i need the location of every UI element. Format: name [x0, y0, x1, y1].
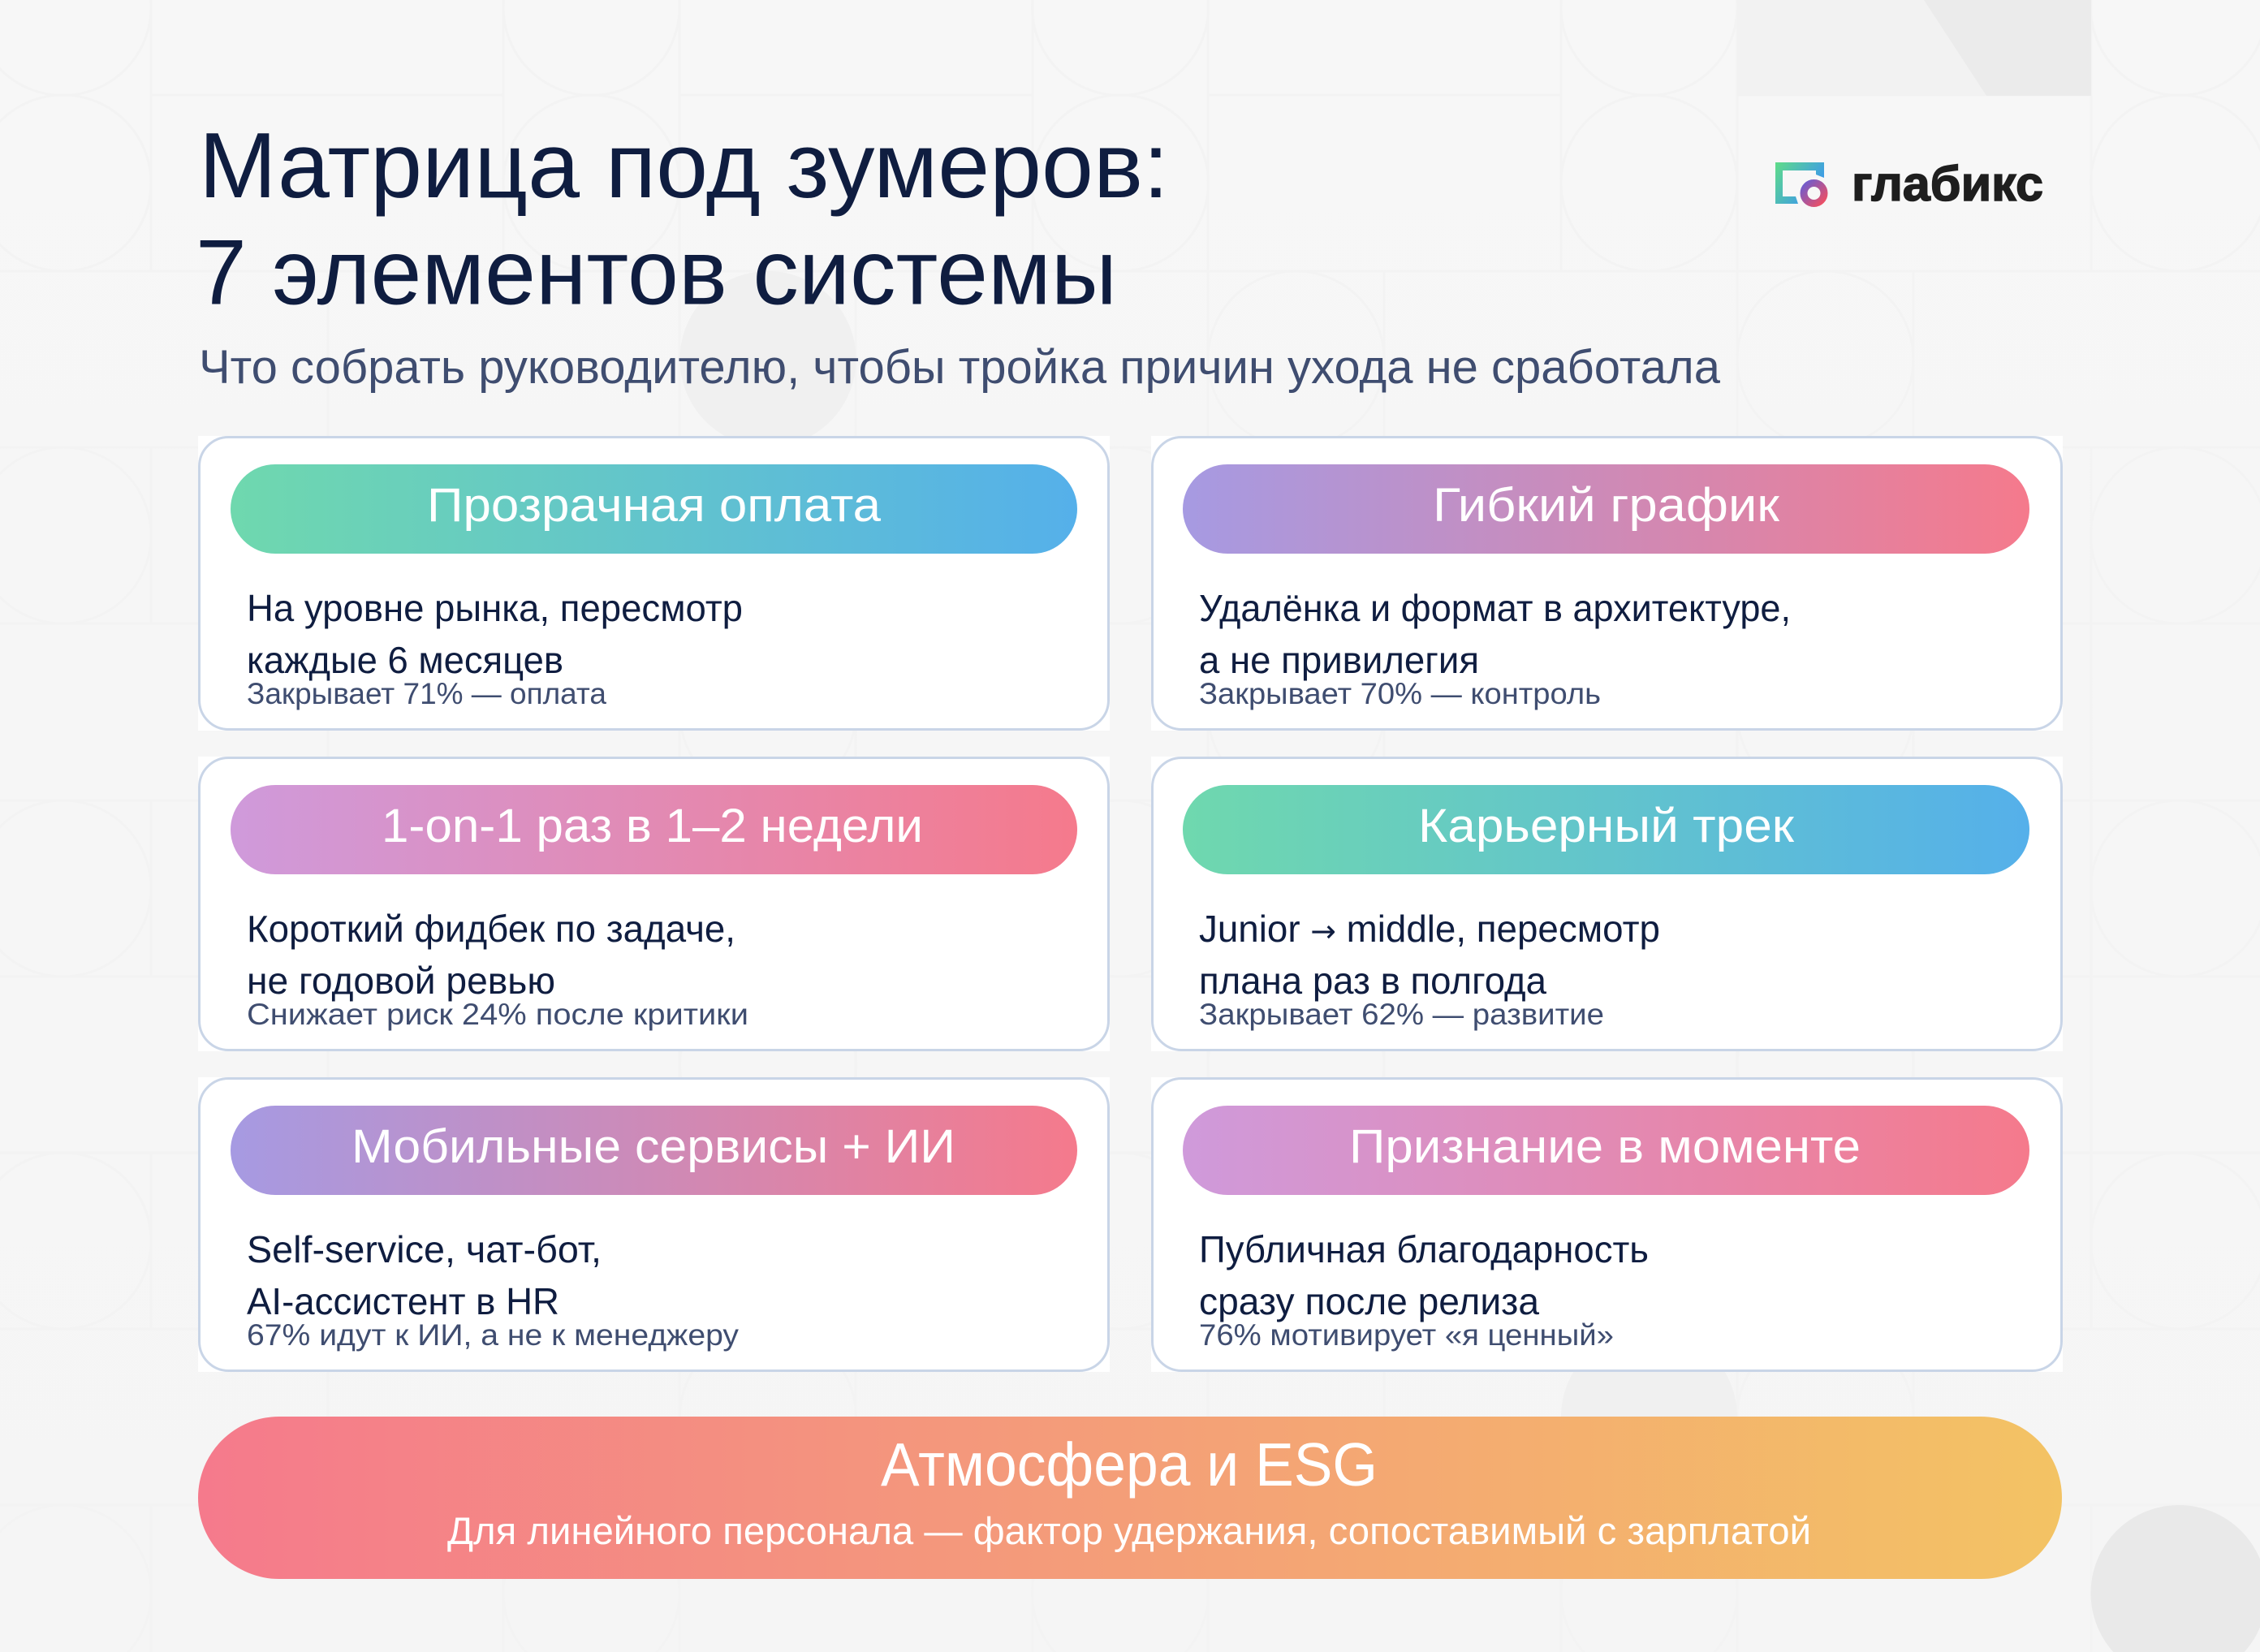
note: Снижает риск 24% после критики	[247, 998, 748, 1031]
pill heading: 1-on-1 раз в 1–2 недели	[382, 800, 923, 852]
title	[196, 114, 1169, 325]
pill heading: Прозрачная оплата	[427, 479, 882, 532]
body text line 2: а не привилегия	[1199, 639, 1479, 681]
note: Закрывает 62% — развитие	[1199, 998, 1604, 1031]
pill heading: Гибкий график	[1433, 479, 1780, 532]
pill heading: Мобильные сервисы + ИИ	[352, 1120, 955, 1173]
panel: Признание в моменте	[1151, 1077, 2063, 1372]
pill heading	[1183, 1106, 2029, 1195]
body text line 2: AI-ассистент в HR	[247, 1280, 559, 1322]
body text: Удалёнка и формат в архитектуре,	[1199, 587, 1791, 629]
note: Закрывает 70% — контроль	[1199, 677, 1601, 710]
body text line 2: плана раз в полгода	[1199, 960, 1546, 1002]
icon: logo mark	[1775, 162, 1824, 204]
pill heading: Карьерный трек	[1418, 800, 1795, 852]
subtitle: Что собрать руководителю, чтобы тройка причин ухода не сработала	[199, 341, 1721, 394]
note: 67% идут к ИИ, а не к менеджеру	[247, 1318, 740, 1352]
body text: Публичная благодарность	[1199, 1228, 1649, 1270]
body text: Короткий фидбек по задаче,	[247, 908, 735, 950]
panel: Прозрачная оплата	[198, 436, 1110, 731]
note: 76% мотивирует «я ценный»	[1199, 1318, 1614, 1352]
body text: Junior → middle, пересмотр	[1199, 908, 1660, 950]
note: Закрывает 71% — оплата	[247, 677, 606, 710]
panel: Гибкий график	[1151, 436, 2063, 731]
title: Матрица под зумеров:	[199, 114, 1169, 218]
body text line 2: сразу после релиза	[1199, 1280, 1539, 1322]
pill heading	[231, 1106, 1077, 1195]
pill heading	[1183, 785, 2029, 874]
pill heading	[1183, 464, 2029, 554]
body text line 2: не годовой ревью	[247, 960, 555, 1002]
title: 7 элементов системы	[196, 221, 1117, 325]
banner: Атмосфера и ESG	[198, 1417, 2062, 1579]
pill heading: Признание в моменте	[1349, 1120, 1861, 1173]
body text: На уровне рынка, пересмотр	[247, 587, 743, 629]
body text: Self-service, чат-бот,	[247, 1228, 602, 1270]
body text line 2: каждые 6 месяцев	[247, 639, 563, 681]
logo: глабикс	[1775, 157, 2043, 211]
pill heading	[231, 785, 1077, 874]
panel: Мобильные сервисы + ИИ	[198, 1077, 1110, 1372]
banner text: Для линейного персонала — фактор удержания, сопоставимый с зарплатой	[447, 1509, 1811, 1552]
logo wordmark: глабикс	[1852, 157, 2043, 211]
pill heading	[231, 464, 1077, 554]
panel: Карьерный трек	[1151, 757, 2063, 1051]
banner heading: Атмосфера и ESG	[881, 1430, 1378, 1499]
panel: 1-on-1 раз в 1–2 недели	[198, 757, 1110, 1051]
